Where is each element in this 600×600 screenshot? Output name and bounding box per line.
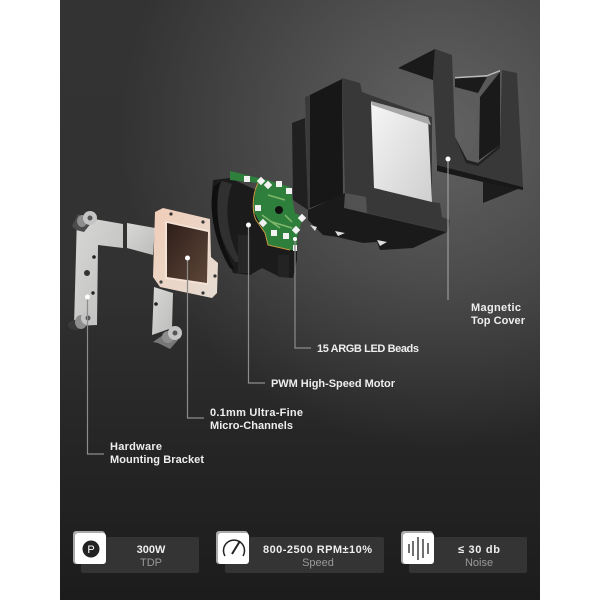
stat: speed: Speed [302,557,334,569]
copper cold plate [153,208,218,298]
label: magnetic top cover: Magnetic [471,302,521,314]
callout line: magnetic top cover [446,156,450,300]
icon: power: P [87,544,95,556]
LED circuit board [230,171,306,251]
stat: TDP: TDP [140,557,162,569]
label: bracket: Hardware [110,441,162,453]
stat: TDP: 300W [137,544,166,556]
magnetic top cover [398,49,523,203]
callout line: micro-channels [185,256,204,418]
label: motor: PWM High-Speed Motor [271,378,396,390]
stat: speed [216,531,384,573]
front panel [342,78,450,232]
label: micro-channels: 0.1mm Ultra-Fine [210,407,303,419]
label: micro-channels: Micro-Channels [210,420,293,432]
window [371,102,432,202]
main housing [292,78,450,250]
screw left [68,311,95,330]
mounting bracket [68,211,182,349]
background panel [60,0,540,600]
icon: gauge [216,531,249,564]
label: LED beads: 15 ARGB LED Beads [317,343,419,355]
stat: speed: 800-2500 RPM±10% [263,544,372,556]
callout line: bracket [85,294,104,454]
stat: noise: Noise [465,557,493,569]
screw right [153,326,182,349]
underside [308,193,447,250]
screw top [72,211,97,232]
stat: TDP [73,531,199,573]
stat: noise: ≤ 30 db [458,544,500,556]
callout line: LED beads [293,237,311,348]
icon: sound wave [401,531,434,564]
label: magnetic top cover: Top Cover [471,315,526,327]
stat: noise [401,531,527,573]
fan motor [212,178,297,278]
label: bracket: Mounting Bracket [110,454,204,466]
callout line: motor [246,222,265,383]
